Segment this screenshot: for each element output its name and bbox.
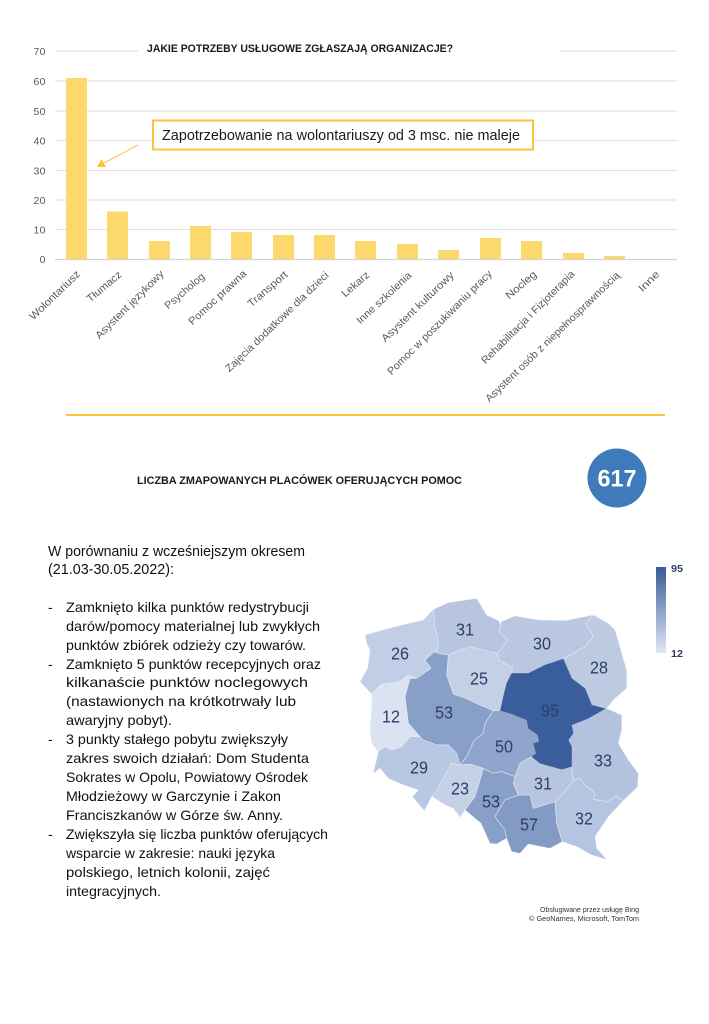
text block: bullet list: (nastawionych na krótkotrwały lub [66,693,296,709]
region: warminsko-mazurskie 30 [498,615,593,673]
map value labels: 23 [451,778,469,798]
text block: bullet list: Zamknięto kilka punktów redystrybucji [66,599,309,615]
map value labels: 33 [594,750,612,770]
region: mazowieckie 95 [500,659,606,769]
map value labels: 31 [534,774,552,794]
text block: bullet list: kilkanaście punktów noclegowych [66,674,308,690]
category labels: Pomoc prawna [186,268,249,328]
category labels [27,267,662,405]
category labels: Inne szkolenia [354,269,414,327]
region: pomorskie 31 [433,598,508,655]
callout: volunteers demand [153,120,533,150]
callout: volunteers demand: Zapotrzebowanie na wolontariuszy od 3 msc. nie maleje [162,127,520,144]
y axis labels: 70 [34,46,46,58]
category labels: Inne [636,268,662,295]
text block: bullet list: Sokrates w Opolu, Powiatowy Ośrodek [66,769,309,785]
region: podlaskie 28 [563,615,627,708]
region: lubuskie 12 [370,675,420,752]
y axis labels: 60 [34,76,46,88]
map value labels: 50 [495,736,513,756]
y axis labels: 0 [40,254,46,266]
region: slaskie 53 [465,768,518,844]
region: lubelskie 33 [568,708,638,802]
map value labels: 28 [590,658,608,678]
y axis labels: 30 [34,166,46,178]
text block: bullet list: - [48,599,53,615]
heading: mapped facilities: LICZBA ZMAPOWANYCH PLACÓWEK OFERUJĄCYCH POMOC [137,474,462,487]
category labels: Pomoc w poszukiwaniu pracy [385,267,495,378]
text block: bullet list: zakres swoich działań: Dom Studenta [66,750,309,766]
text block: bullet list: integracyjnych. [66,883,161,899]
map value labels: 57 [520,814,538,834]
category labels: Zajęcia dodatkowe dla dzieci [223,269,332,375]
text block: bullet list: punktów zbiórek odzieży czy towarów. [66,637,306,653]
map value labels: 29 [410,758,428,778]
map value labels: 53 [482,792,500,812]
map value labels: 95 [541,700,559,720]
region: wielkopolskie 53 [405,652,493,765]
text block: bullet list: Zamknięto 5 punktów recepcyjnych oraz [66,656,321,672]
y axis labels: 50 [34,106,46,118]
bars [66,78,625,259]
category labels: Lekarz [339,269,372,300]
category labels: Nocleg [503,268,539,302]
region: opolskie 23 [432,763,483,817]
map value labels: 53 [435,702,453,722]
region: lodzkie 50 [460,711,539,777]
arrow: callout to volunteer bar [97,145,138,167]
category labels: Tłumacz [84,269,124,305]
divider line [66,414,665,416]
map value labels [382,620,612,834]
map value labels: 25 [470,668,488,688]
map value labels: 26 [391,644,409,664]
map attribution: © GeoNames, Microsoft, TomTom [529,915,639,923]
map value labels: 30 [533,634,551,654]
region: podkarpackie 32 [555,778,623,859]
region: swietokrzyskie 31 [513,757,573,808]
badge: total 617 [588,448,646,508]
category labels: Asystent językowy [93,267,167,342]
map value labels: 32 [575,808,593,828]
y axis labels: 10 [34,224,46,236]
text block: bullet list: - [48,731,53,747]
text block: bullet list: awaryjny pobyt). [66,712,172,728]
map value labels: 12 [382,706,400,726]
text block: bullet list: - [48,826,53,842]
chart gridlines [55,51,677,260]
choropleth map of Poland [360,598,638,859]
category labels: Transport [245,269,290,310]
title: chart heading: JAKIE POTRZEBY USŁUGOWE ZGŁASZAJĄ ORGANIZACJE? [147,43,453,55]
text block: bullet list: wsparcie w zakresie: nauki języka [65,845,275,861]
map legend [656,564,683,660]
map value labels: 31 [456,620,474,640]
category labels: Asystent osób z niepełnosprawnością [483,270,623,405]
text block: bullet list: Franciszkanów w Górze św. Anny. [66,807,283,823]
y axis labels: 40 [34,136,46,148]
map attribution [529,907,639,923]
category labels: Rehabilitacja i Fizjoterapia [479,268,578,367]
region: zachodniopomorskie 26 [360,609,438,694]
region: malopolskie 57 [495,795,562,853]
y axis labels [34,46,46,266]
text block: bullet list: darów/pomocy materialnej lub zwykłych [66,618,320,634]
category labels: Wolontariusz [27,268,83,323]
category labels: Psycholog [162,271,207,312]
text block: bullet list: - [48,656,53,672]
bar chart: service needs [27,46,677,405]
text block: bullet list: polskiego, letnich kolonii, zajęć [66,864,270,880]
map regions [360,598,638,859]
text block: bullet list: Zwiększyła się liczba punktów oferujących [66,826,328,842]
text block: comparison heading: (21.03-30.05.2022): [48,562,174,578]
text block: bullet list [48,599,328,899]
text block: bullet list: Młodzieżowy w Garczynie i Zakon [66,788,281,804]
text block: comparison heading: W porównaniu z wcześniejszym okresem [48,544,305,560]
region: dolnoslaskie 29 [373,737,460,811]
category labels: Asystent kulturowy [379,269,457,345]
map legend: 95 [671,564,683,575]
text block: comparison heading [48,544,305,578]
map attribution: Obsługiwane przez usługę Bing [540,907,639,914]
map legend: 12 [671,649,683,660]
y axis labels: 20 [34,195,46,207]
text block: bullet list: 3 punkty stałego pobytu zwiększyły [66,731,288,747]
region: kujawsko-pomorskie 25 [447,647,512,711]
badge: total 617: 617 [598,466,636,492]
